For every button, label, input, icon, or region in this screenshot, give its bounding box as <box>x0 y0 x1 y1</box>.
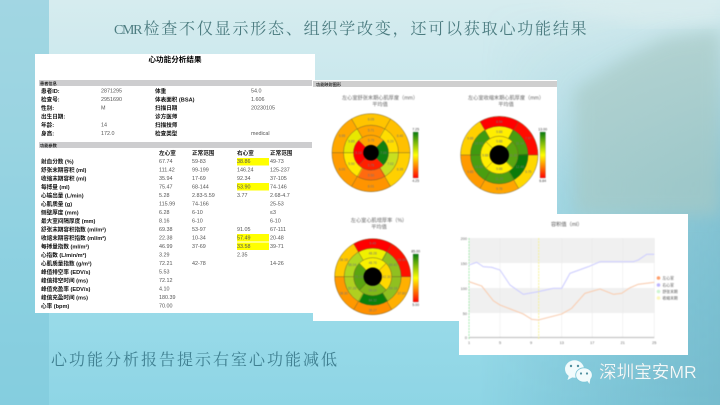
section: function parameters table: 6-10 <box>192 218 203 224</box>
section: function parameters table: 33.58 <box>237 244 250 250</box>
bullseye chart: end-systolic thickness <box>454 94 547 201</box>
section: function parameters table: 74-166 <box>192 202 209 208</box>
section: function parameters table: 67.74 <box>159 159 172 165</box>
bullseye chart: wall thickening: 5.00 <box>412 303 419 307</box>
bullseye chart: wall thickening: 16.30 <box>398 258 406 262</box>
section: patient information: 1.606 <box>251 97 264 103</box>
section: function parameters table: 10-34 <box>192 236 206 242</box>
bullseye chart: end-systolic thickness: 11.20 <box>495 177 503 181</box>
bullseye chart: end-diastolic thickness: 6.01 <box>368 185 374 189</box>
section: function parameters table: 42-78 <box>192 261 206 267</box>
bullseye chart: end-systolic thickness: 9.88 <box>496 167 503 171</box>
section: patient information: 14 <box>101 122 107 128</box>
bullseye chart: wall thickening: 36.18 <box>340 258 348 262</box>
section: function parameters table: 侧壁厚度 (mm) <box>41 208 79 216</box>
bullseye chart: end-systolic thickness: 8.94 <box>496 120 503 124</box>
section: function parameters table: 69.38 <box>159 227 172 233</box>
section: function parameters table: 49-73 <box>270 159 284 165</box>
section: function parameters table: 3.77 <box>237 193 248 199</box>
line chart: volume curves: 200 <box>461 237 467 241</box>
line chart: volume curves: 9 <box>530 341 532 345</box>
bullseye chart: wall thickening: 70.18 <box>355 275 363 279</box>
section: function parameters table: 心率 (bpm) <box>41 302 69 310</box>
bullseye chart: end-systolic thickness: 9.88 <box>496 130 503 134</box>
section: function parameters table: 8.16 <box>159 218 170 224</box>
bullseye chart: wall thickening: 48.28 <box>369 252 377 256</box>
panel: bullseye maps <box>313 80 557 322</box>
bullseye chart: wall thickening: 平均值 <box>371 222 387 230</box>
section: function parameters table: 91.05 <box>237 227 250 233</box>
section: function parameters table: 正常范围 <box>270 149 293 157</box>
section: patient information: 检查号: <box>41 96 60 104</box>
section: function parameters table: 68-144 <box>192 184 209 190</box>
section: function parameters table: 92.34 <box>237 176 250 182</box>
section: function parameters table: 25-53 <box>270 202 284 208</box>
section: function parameters table: 14-26 <box>270 261 284 267</box>
section: patient information: 20230105 <box>251 106 275 112</box>
chart legend: 左心室 <box>662 276 674 280</box>
section: function parameters table: 74-146 <box>270 184 287 190</box>
title: CMR 检查不仅显示形态、组织学改变，还可以获取心功能结果 <box>114 19 588 38</box>
section: function parameters table: 72.12 <box>159 278 172 284</box>
section: function parameters table: 111.42 <box>159 168 175 174</box>
section: function parameters table: 146.24 <box>237 168 254 174</box>
watermark: WeChat account <box>565 360 697 384</box>
bullseye chart: end-diastolic thickness: 5.95 <box>339 134 345 138</box>
section: function parameters table: 心输出量 (L/min) <box>41 192 84 200</box>
section: function parameters table: ≤3 <box>270 210 276 216</box>
section: function parameters table: 35.94 <box>159 176 172 182</box>
section: function parameters table: 70.00 <box>159 304 172 310</box>
chart legend: 右心室 <box>662 282 674 288</box>
bullseye chart: end-systolic thickness: 9.76 <box>496 187 503 191</box>
line chart: volume curves: 13 <box>560 341 564 345</box>
section: patient information: 检查类型 <box>155 130 178 138</box>
bullseye chart: end-systolic thickness: 7.97 <box>525 136 532 140</box>
chart legend: 收缩末期 <box>662 296 678 300</box>
section: function parameters table: 峰值充盈率 (EDV/s) <box>41 285 91 293</box>
icon: WeChat bubbles <box>565 360 592 384</box>
bullseye chart: end-systolic thickness: 11.30 <box>509 153 517 157</box>
bullseye chart: end-systolic thickness: 左心室收缩末期心肌厚度（mm） <box>468 94 544 102</box>
bullseye chart: wall thickening: 59.20 <box>369 289 377 293</box>
section: function parameters table: 功能参数 <box>40 142 58 149</box>
bullseye chart: end-diastolic thickness: 平均值 <box>372 100 388 108</box>
section: function parameters table: 125-237 <box>270 168 290 174</box>
bullseye chart: end-diastolic thickness: 6.40 <box>397 134 403 138</box>
section: patient information: 患者信息 <box>40 80 57 87</box>
bullseye chart: wall thickening: 9.49 <box>369 242 376 246</box>
section: function parameters table: 5.53 <box>159 270 170 276</box>
bullseye chart: wall thickening: 左心室心肌增厚率（%） <box>351 216 407 224</box>
section: function parameters table: 心肌质量指数 (g/m²) <box>41 260 92 268</box>
bullseye chart: wall thickening: 42.30 <box>383 275 391 279</box>
section: function parameters table: 2.68-4.7 <box>270 193 290 199</box>
section: function parameters table: 6-10 <box>270 218 281 224</box>
section: function parameters table: 6-10 <box>192 210 203 216</box>
bullseye chart: end-systolic thickness: 11.14 <box>516 142 524 146</box>
bullseye chart: end-diastolic thickness: 7.02 <box>387 162 394 166</box>
bullseye chart: wall thickening: 38.30 <box>340 292 348 296</box>
section: function parameters table: 180.39 <box>159 295 176 301</box>
bullseye chart: end-diastolic thickness: 左心室舒张末期心肌厚度（mm） <box>342 94 418 102</box>
section: patient information: 体重 <box>155 87 167 95</box>
section: function parameters table: 39-71 <box>270 244 284 250</box>
bullseye chart: wall thickening: 55.04 <box>348 263 356 267</box>
bullseye chart: end-systolic thickness: 6.84 <box>539 179 546 183</box>
bullseye chart: end-diastolic thickness: 6.20 <box>387 140 394 144</box>
section: function parameters table: 6.28 <box>159 210 170 216</box>
bullseye chart: end-systolic thickness: 13.00 <box>538 128 547 132</box>
bullseye chart: end-diastolic thickness: 5.50 <box>368 174 374 178</box>
chart legend: 舒张末期 <box>662 289 678 294</box>
bullseye chart: wall thickening: 84.32 <box>369 299 377 303</box>
bullseye chart: end-diastolic thickness: 7.00 <box>380 151 387 155</box>
bullseye chart: wall thickening: 85.00 <box>411 250 420 254</box>
line chart: volume curves: 25 <box>652 341 656 345</box>
section: function parameters table: 37-105 <box>270 176 287 182</box>
section: function parameters table: 53.90 <box>237 184 250 190</box>
section: function parameters table: 17-69 <box>192 176 206 182</box>
section: patient information: 172.0 <box>101 131 114 137</box>
chart legend <box>657 276 678 300</box>
section: patient information: 身高: <box>41 130 54 138</box>
bullseye chart: end-diastolic thickness: 5.90 <box>348 162 355 166</box>
section: function parameters table: 37-69 <box>192 244 206 250</box>
section: function parameters table: 收缩末期容积指数 (ml/m²) <box>41 234 106 242</box>
bullseye chart: wall thickening: 57.26 <box>348 287 356 291</box>
bullseye chart: end-diastolic thickness: 5.85 <box>348 140 355 144</box>
section: function parameters table: 72.21 <box>159 261 172 267</box>
section: patient information: 扫描技师 <box>155 121 178 129</box>
section: patient information: 年龄: <box>41 121 54 129</box>
section: function parameters table: 舒张末期容积指数 (ml/m²) <box>41 226 106 234</box>
section: function parameters table: 左心室 <box>159 149 176 157</box>
section: function parameters table: 59-83 <box>192 159 206 165</box>
bullseye chart: end-systolic thickness: 9.85 <box>467 170 474 174</box>
section: function parameters table: 3.29 <box>159 252 170 258</box>
bullseye chart: end-diastolic thickness: 4.25 <box>412 179 419 183</box>
bullseye chart: end-systolic thickness: 9.88 <box>496 140 503 144</box>
section: function parameters table: 心肌质量 (g) <box>41 200 72 208</box>
bullseye chart: wall thickening: 48.76 <box>369 261 377 265</box>
line chart: volume curves: 1 <box>468 341 470 345</box>
bullseye chart: end-diastolic thickness: 5.75 <box>368 139 374 143</box>
section: function parameters table: 收缩末期容积 (ml) <box>41 174 87 182</box>
bullseye chart: wall thickening: 37.60 <box>398 292 406 296</box>
bullseye chart: wall thickening: 60.41 <box>389 263 397 267</box>
section: patient information: 出生日期: <box>41 112 65 120</box>
section: function parameters table: 心指数 (L/min/m²) <box>41 251 87 259</box>
bottom caption: 心功能分析报告提示右室心功能减低 <box>51 350 339 369</box>
section: function parameters table: 99-199 <box>192 168 209 174</box>
section: patient information <box>39 80 312 138</box>
section: patient information: 诊方医师 <box>155 112 178 120</box>
section: function parameters table: 4.10 <box>159 286 170 292</box>
line chart: volume curves: 21 <box>621 341 625 345</box>
line chart: volume curves: 5 <box>499 341 501 345</box>
section: function parameters table: 46.99 <box>159 244 172 250</box>
bullseye chart: end-systolic thickness: 12.48 <box>516 165 524 169</box>
section: function parameters table: 射血分数 (%) <box>41 158 74 166</box>
section: patient information: 患者ID: <box>41 87 60 95</box>
section: function parameters table: 最大室间隔厚度 (mm) <box>41 217 96 225</box>
bullseye chart: end-systolic thickness: 平均值 <box>498 100 514 108</box>
section: function parameters table: 67-111 <box>270 227 286 233</box>
bullseye chart: end-systolic thickness: 9.88 <box>482 153 489 157</box>
section: function parameters table: 75.47 <box>159 184 172 190</box>
bullseye chart: wall thickening: 39.27 <box>369 309 377 313</box>
section: function parameters table: 峰值排空时间 (ms) <box>41 276 88 284</box>
section: function parameters table: 2.35 <box>237 252 248 258</box>
section: patient information: 扫描日期 <box>155 104 178 112</box>
line chart: volume curves: 17 <box>590 341 594 345</box>
bullseye chart: end-systolic thickness: 9.75 <box>525 170 532 174</box>
section: function parameters table: 5.28 <box>159 193 170 199</box>
section: function parameters table: 正常范围 <box>192 149 215 157</box>
section: function parameters table: 53-97 <box>192 227 206 233</box>
section: patient information: 2871295 <box>101 88 122 94</box>
section: function parameters table: 每搏量 (ml) <box>41 183 70 191</box>
panel: volume curve chart <box>459 214 688 355</box>
line chart: volume curves: 0 <box>465 336 467 340</box>
section: function parameters table: 右心室 <box>237 149 254 157</box>
account name: 深圳宝安MR <box>599 362 697 382</box>
line chart: volume curves: 150 <box>461 262 467 266</box>
section: patient information: 体表面积 (BSA) <box>155 96 195 104</box>
section: function parameters table <box>39 142 312 310</box>
bullseye chart: end-systolic thickness: 10.93 <box>475 142 483 146</box>
section: patient information: M <box>101 106 106 112</box>
line chart: volume curves <box>461 237 656 345</box>
section: function parameters table: 115.99 <box>159 202 175 208</box>
section: function parameters table: 38.86 <box>237 159 250 165</box>
section: function parameters table: 57.49 <box>237 236 250 242</box>
panel: bullseye maps: 功能映射图形 <box>316 81 342 88</box>
report heading: 心功能分析结果 <box>148 54 202 64</box>
bullseye chart: end-diastolic thickness: 5.71 <box>368 129 374 133</box>
section: function parameters table: 22.38 <box>159 236 172 242</box>
section: function parameters table: 每搏量指数 (ml/m²) <box>41 242 89 250</box>
section: function parameters table: 20-48 <box>270 236 284 242</box>
section: function parameters table: 峰值充盈时间 (ms) <box>41 294 88 302</box>
section: patient information: 54.0 <box>251 88 262 94</box>
section: function parameters table: 2.83-5.59 <box>192 193 215 199</box>
section: function parameters table: 峰值排空率 (EDV/s) <box>41 268 91 276</box>
bullseye chart: wall thickening <box>327 216 420 322</box>
bullseye chart: end-diastolic thickness <box>326 94 419 198</box>
bullseye chart: end-diastolic thickness: 5.18 <box>355 151 362 155</box>
bullseye chart: end-systolic thickness: 10.88 <box>475 165 483 169</box>
bullseye chart: end-diastolic thickness: 5.75 <box>368 164 374 168</box>
bullseye chart: end-diastolic thickness: 6.35 <box>397 168 403 172</box>
section: patient information: 2951690 <box>101 97 122 103</box>
section: patient information: medical <box>251 131 270 137</box>
bullseye chart: end-systolic thickness: 9.88 <box>467 136 474 140</box>
bullseye chart: end-diastolic thickness: 7.25 <box>412 128 419 132</box>
section: patient information: 性别: <box>41 104 54 112</box>
line chart: volume curves: 50 <box>463 312 467 316</box>
line chart: volume curves: 100 <box>461 287 467 291</box>
bullseye chart: end-diastolic thickness: 6.05 <box>368 118 374 122</box>
section: function parameters table: 舒张末期容积 (ml) <box>41 166 87 174</box>
panel: function analysis report <box>35 54 315 313</box>
bullseye chart: end-diastolic thickness: 6.00 <box>339 168 345 172</box>
chart title: 容积值（ml） <box>551 220 582 228</box>
bullseye chart: wall thickening: 59.18 <box>389 287 397 291</box>
